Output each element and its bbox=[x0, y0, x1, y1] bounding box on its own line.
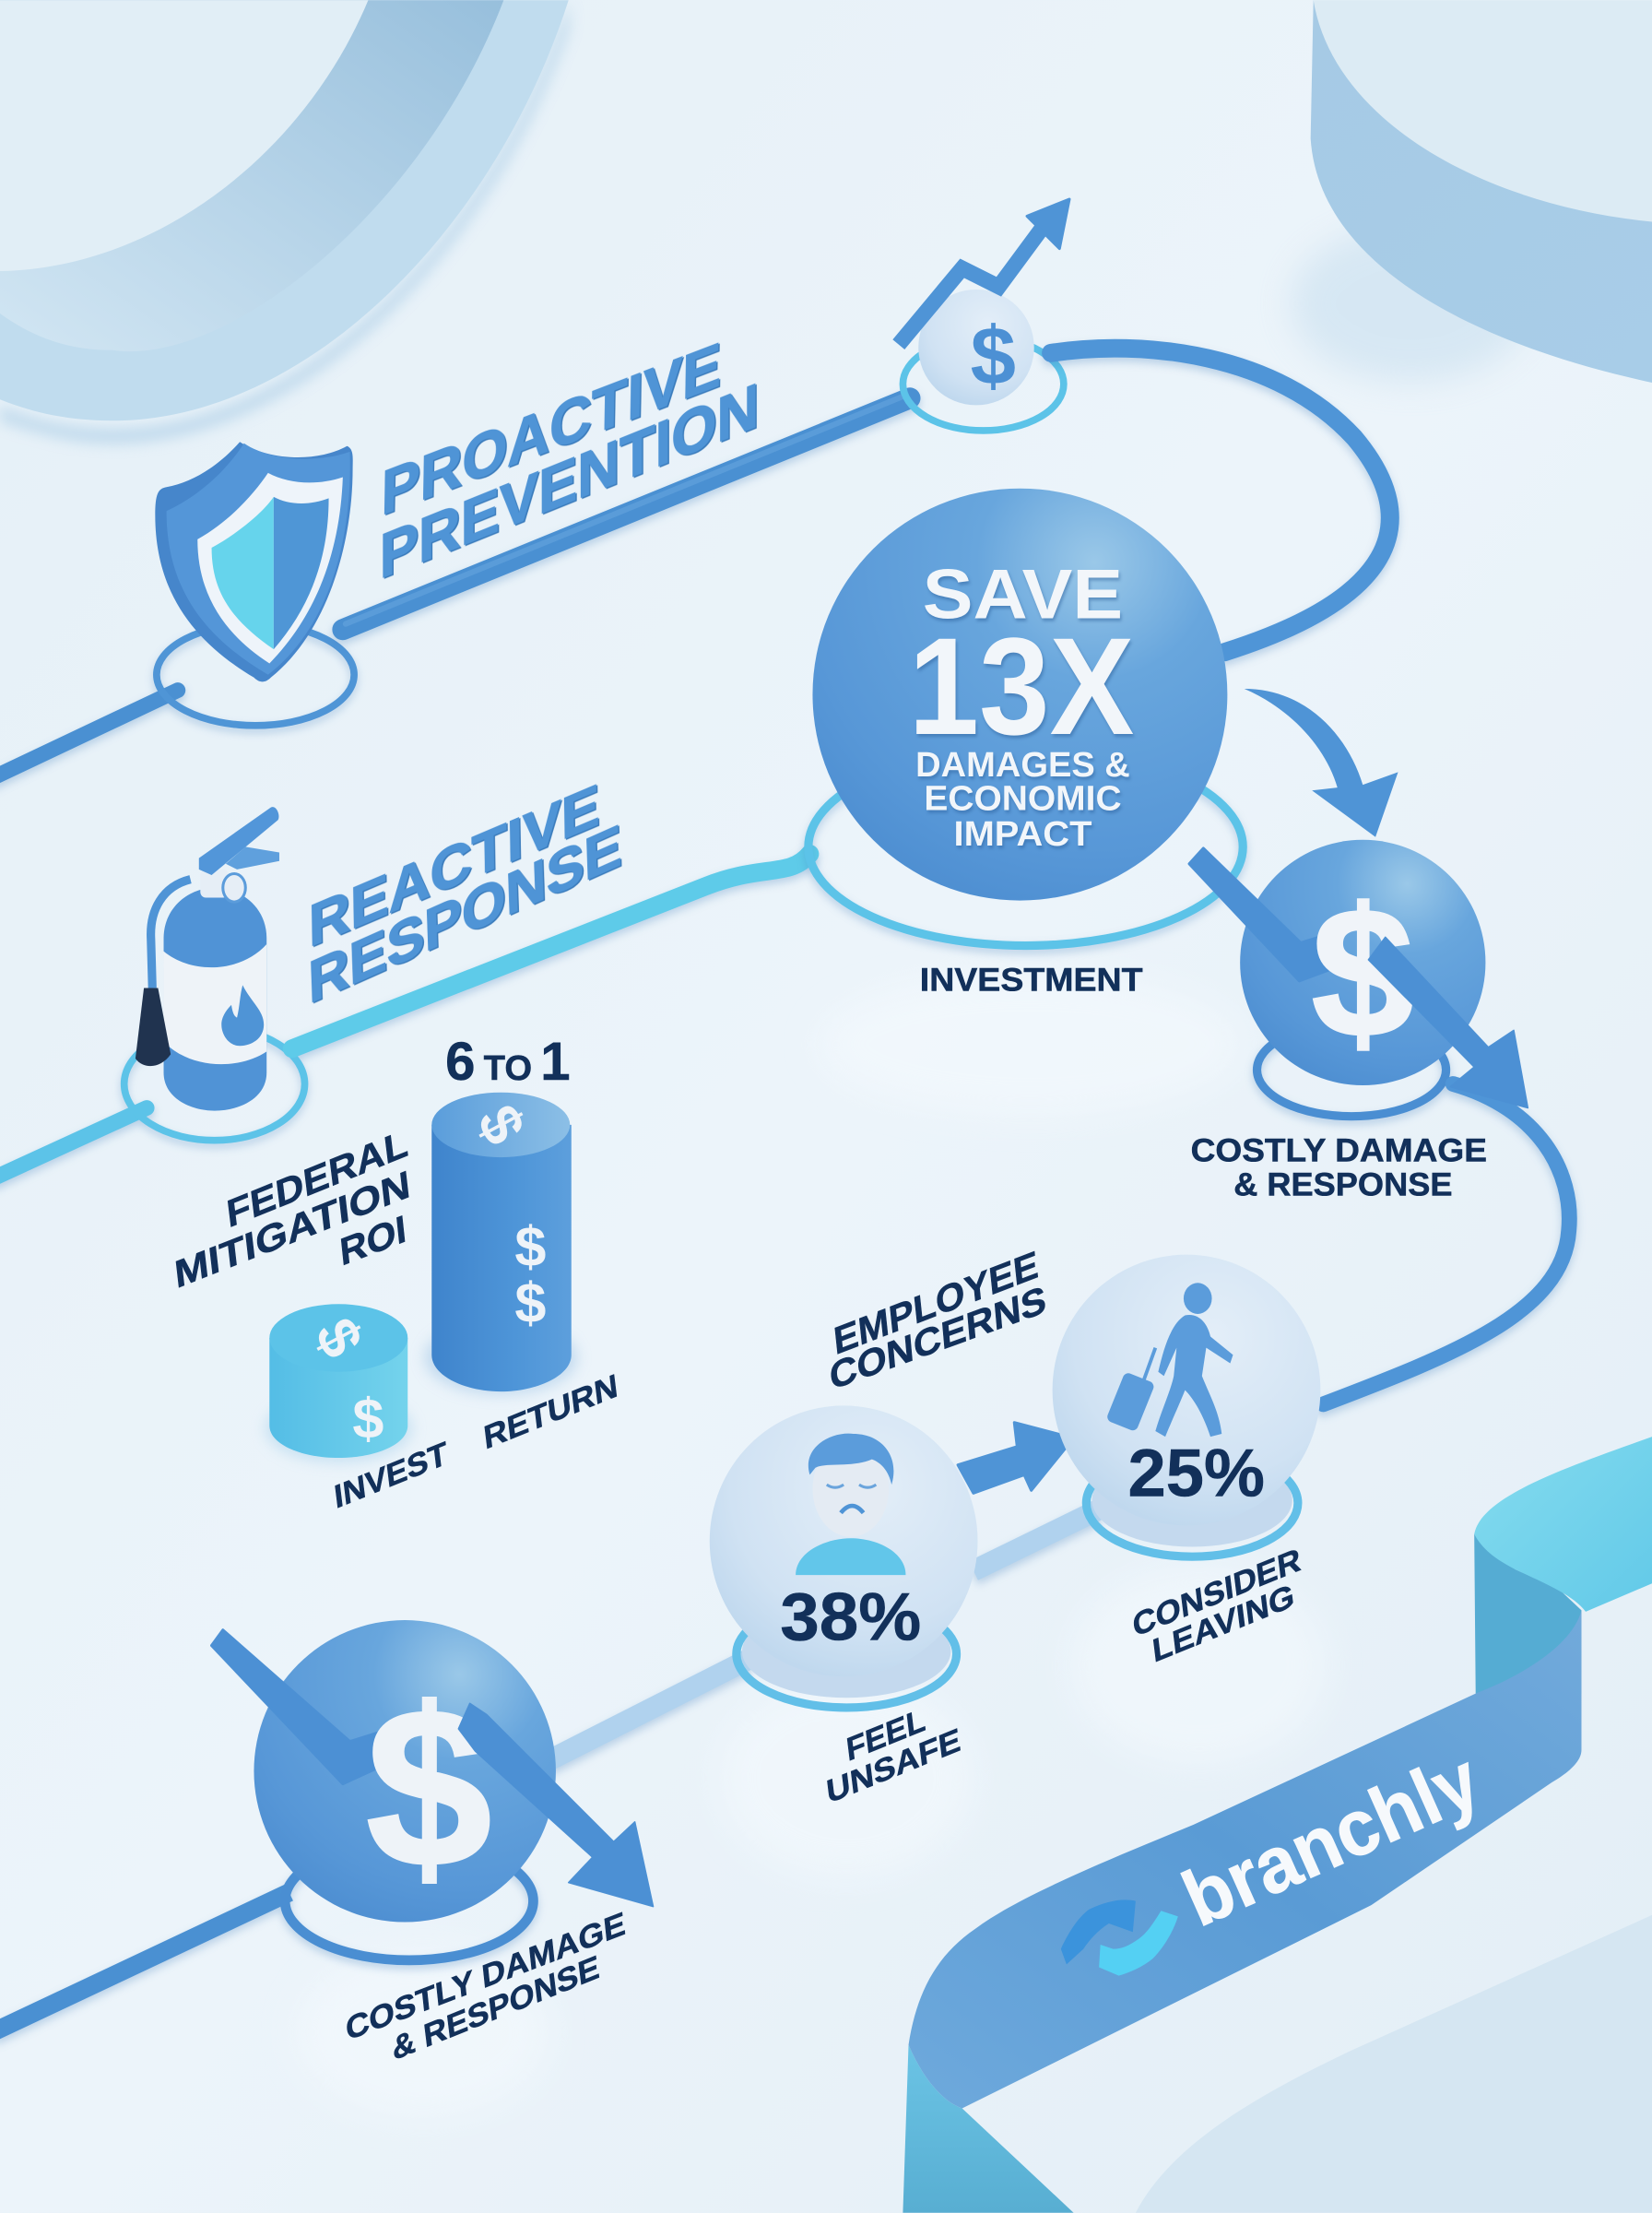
icon: shield bbox=[155, 442, 353, 681]
icon: sad person bbox=[796, 1434, 905, 1575]
chart: tall return cylinder: $ bbox=[514, 1272, 546, 1334]
tube after costly damage bbox=[1323, 1084, 1569, 1404]
heading: proactive prevention: PREVENTION bbox=[380, 369, 759, 592]
sphere: 25 percent consider leaving bbox=[1053, 1255, 1320, 1526]
proactive path: stub and node ring bbox=[0, 624, 354, 777]
floor reflections bbox=[296, 974, 1326, 2117]
label: costly damage and response: COSTLY DAMAGE bbox=[1191, 1133, 1487, 1169]
chart: tall return cylinder bbox=[425, 1093, 577, 1394]
ribbon with branchly logo bbox=[903, 1437, 1652, 2213]
label: consider leaving bbox=[1131, 1542, 1303, 1670]
icon: fire extinguisher bbox=[136, 807, 279, 1111]
sphere: lower costly damage dollar with falling arrow bbox=[212, 1620, 654, 1923]
big sphere ring bbox=[808, 748, 1243, 946]
sphere: lower costly damage dollar with falling arrow: $ bbox=[366, 1661, 491, 1913]
icon: walking person with suitcase bbox=[1105, 1283, 1233, 1437]
icon: small dollar sphere with rising arrow: $ bbox=[971, 310, 1016, 401]
label: invest: INVEST bbox=[332, 1436, 449, 1516]
label: consider leaving: LEAVING bbox=[1150, 1578, 1296, 1670]
label: lower costly damage and response: & RESPONSE bbox=[390, 1949, 601, 2068]
icon: branchly logo bbox=[1061, 1899, 1178, 1976]
big sphere: save 13x bbox=[812, 489, 1227, 901]
label: federal mitigation roi bbox=[172, 1120, 412, 1297]
big sphere: save 13x: IMPACT bbox=[953, 814, 1092, 854]
sphere: 38 percent feel unsafe: 38% bbox=[780, 1579, 921, 1654]
sphere: 38 percent feel unsafe bbox=[710, 1405, 978, 1676]
label: employee concerns bbox=[828, 1242, 1048, 1399]
node ring 25 percent bbox=[1086, 1450, 1298, 1556]
label: feel unsafe: UNSAFE bbox=[825, 1722, 962, 1811]
label: investment: INVESTMENT bbox=[920, 963, 1143, 999]
heading: reactive response bbox=[307, 771, 622, 1016]
heading: reactive response: RESPONSE bbox=[307, 811, 622, 1016]
arrow between employee spheres bbox=[958, 1423, 1074, 1493]
big sphere: save 13x: SAVE bbox=[923, 556, 1123, 634]
decorative cylinder top right bbox=[1291, 0, 1652, 383]
sphere: costly damage dollar with falling arrow bbox=[1189, 840, 1528, 1108]
label: lower costly damage and response: COSTLY DAMAGE bbox=[344, 1905, 627, 2048]
big sphere: save 13x: DAMAGES & bbox=[915, 745, 1130, 785]
light tubes between employee spheres bbox=[548, 1510, 1098, 1761]
node ring costly damage bbox=[1257, 1024, 1446, 1117]
label: costly damage and response: & RESPONSE bbox=[1233, 1166, 1452, 1202]
big sphere: save 13x: 13X bbox=[909, 609, 1134, 763]
chart: short invest cylinder: $ bbox=[352, 1388, 384, 1450]
reactive path: stub, ring and tube bbox=[0, 854, 809, 1178]
chart: short invest cylinder bbox=[266, 1304, 412, 1462]
label: feel unsafe: FEEL bbox=[844, 1701, 927, 1769]
proactive path: main tube bbox=[343, 396, 910, 630]
label: costly damage and response bbox=[1191, 1133, 1487, 1202]
sphere: costly damage dollar with falling arrow: $ bbox=[1312, 870, 1414, 1075]
label: feel unsafe bbox=[825, 1701, 962, 1811]
chart: tall return cylinder: $ bbox=[514, 1215, 546, 1278]
chart: tall return cylinder: $ bbox=[465, 1095, 538, 1154]
curved arrow down bbox=[1245, 689, 1398, 837]
lower path stub and node ring bbox=[0, 1841, 533, 2032]
small node ring teal bbox=[903, 337, 1064, 431]
label: federal mitigation roi: ROI bbox=[337, 1206, 408, 1274]
label: consider leaving: CONSIDER bbox=[1131, 1542, 1303, 1644]
label: federal mitigation roi: FEDERAL bbox=[224, 1120, 410, 1237]
node ring 38 percent bbox=[737, 1601, 957, 1708]
label: employee concerns: CONCERNS bbox=[828, 1277, 1048, 1399]
sphere: 25 percent consider leaving: 25% bbox=[1127, 1435, 1265, 1510]
big sphere: save 13x: ECONOMIC bbox=[924, 779, 1122, 819]
ribbon with branchly logo: branchly bbox=[1170, 1735, 1493, 1944]
label: federal mitigation roi: MITIGATION bbox=[172, 1162, 412, 1297]
chart: short invest cylinder: $ bbox=[302, 1308, 376, 1367]
decorative arch top left bbox=[0, 0, 569, 444]
heading: proactive prevention: PROACTIVE bbox=[381, 328, 722, 528]
decorative plate bottom right bbox=[1136, 1915, 1652, 2213]
label: return: RETURN bbox=[482, 1367, 620, 1457]
label: employee concerns: EMPLOYEE bbox=[832, 1242, 1040, 1363]
icon: small dollar sphere with rising arrow bbox=[899, 199, 1069, 405]
ratio: 6 to 1: 6 TO1 bbox=[445, 1032, 571, 1092]
tube to big sphere bbox=[1051, 349, 1390, 652]
heading: reactive response: REACTIVE bbox=[308, 771, 600, 960]
